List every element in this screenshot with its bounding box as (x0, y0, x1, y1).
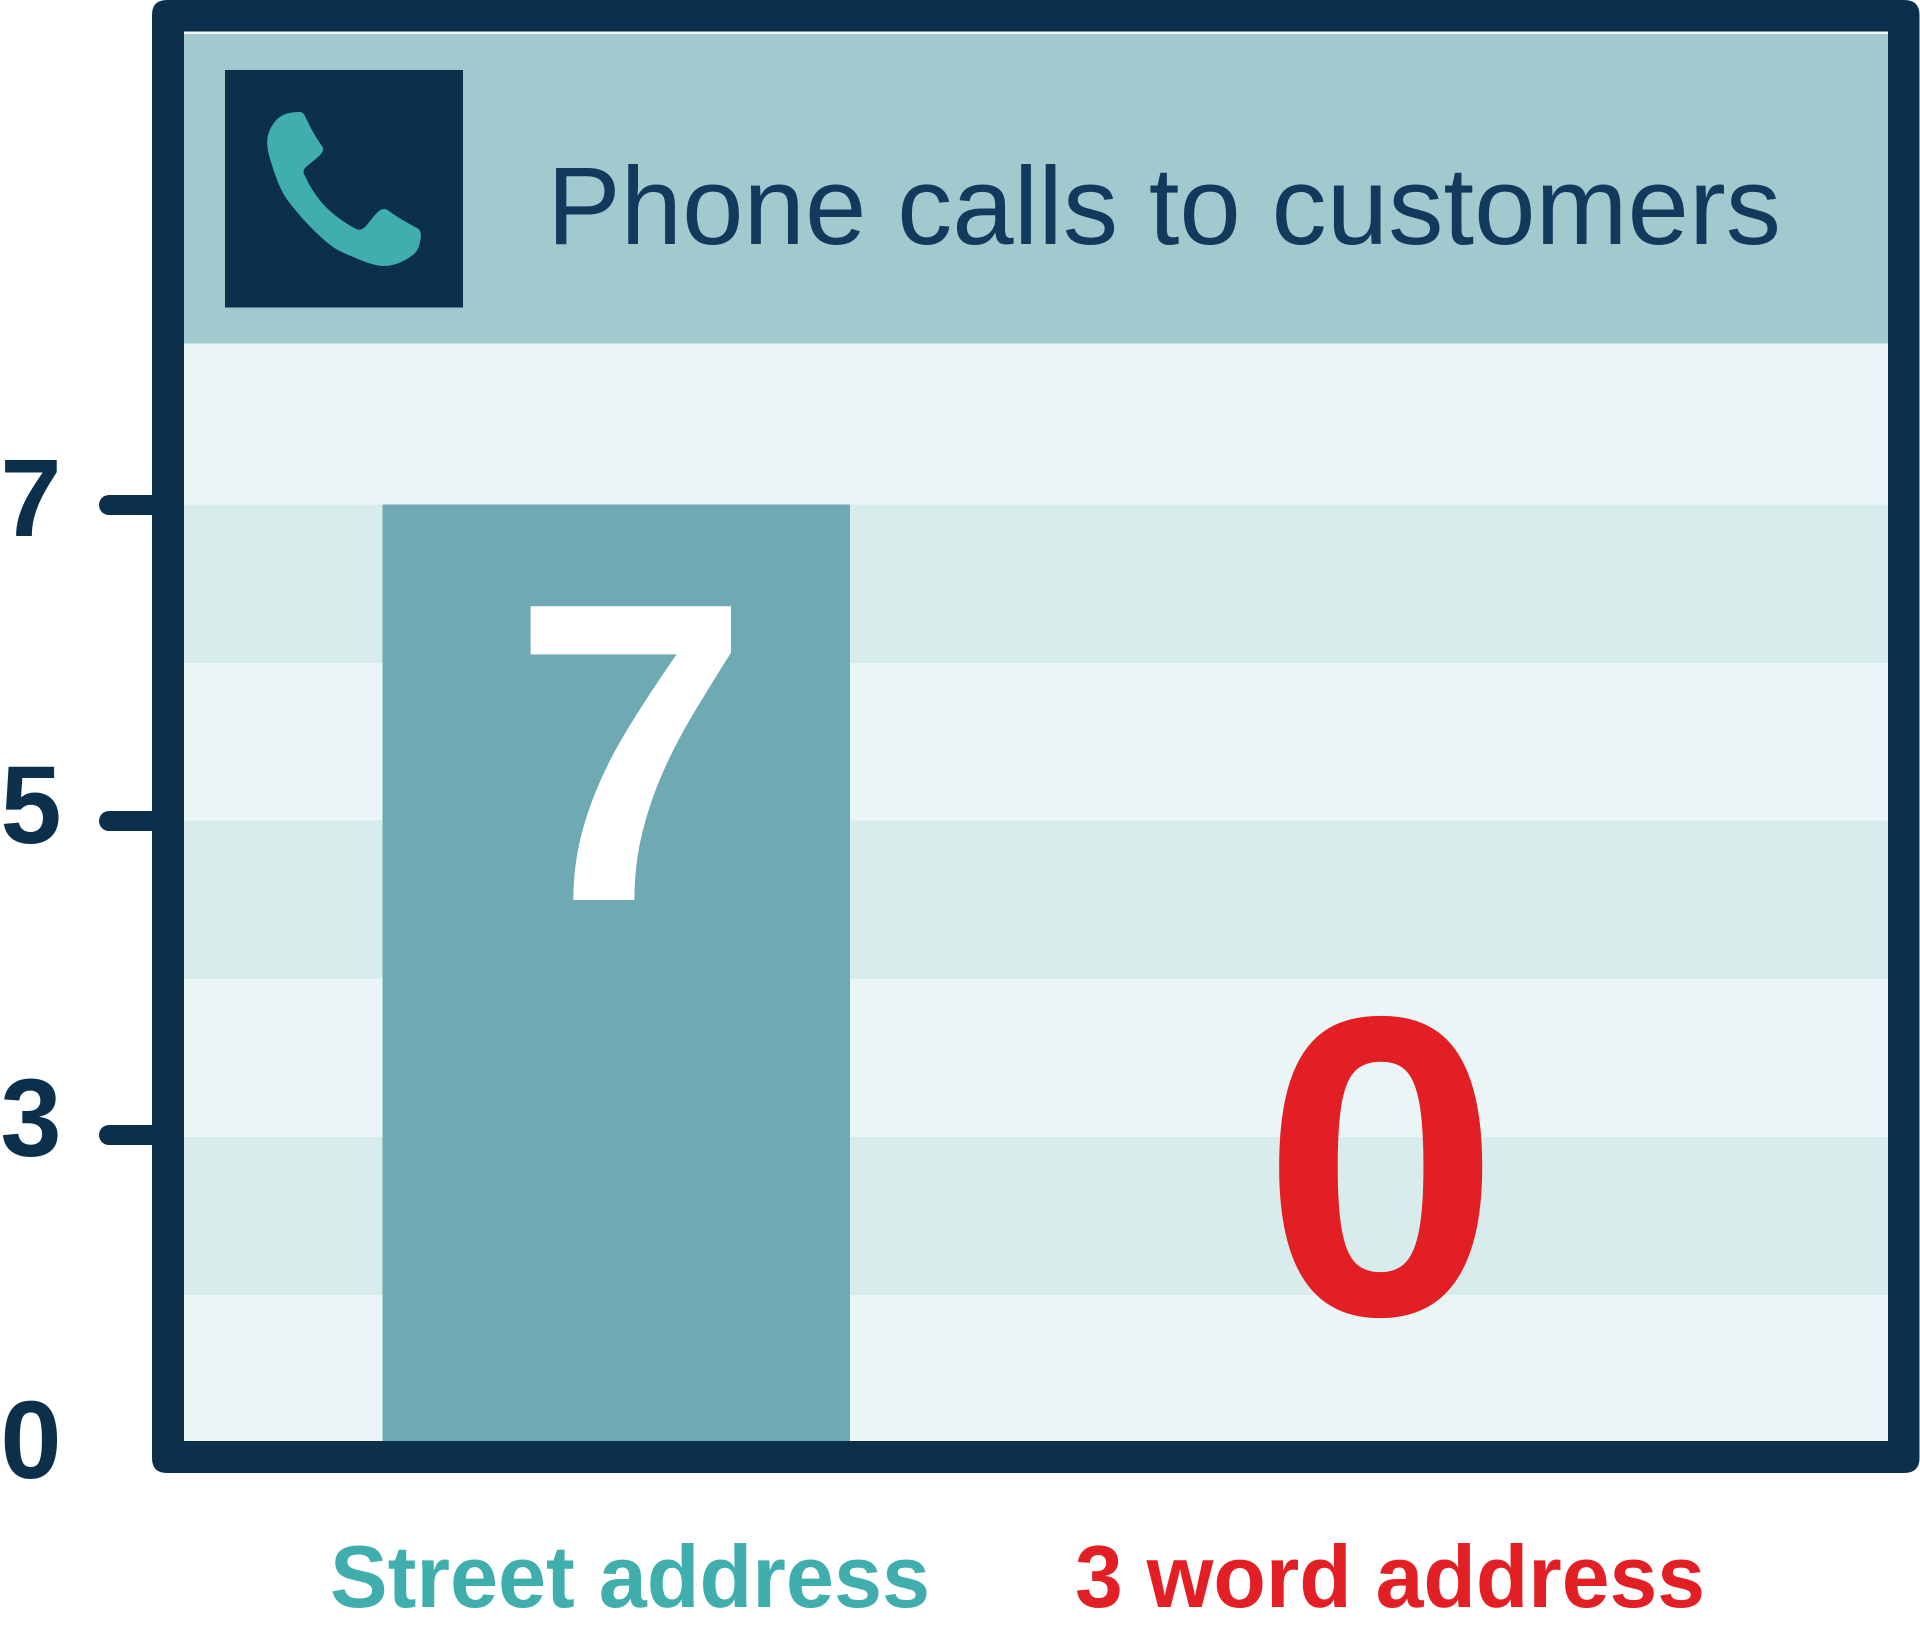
icon: phone handset (225, 70, 463, 308)
axis label 0: 0 (0, 1379, 62, 1502)
bar value: 7 (512, 514, 750, 991)
axis label 7: 7 (0, 437, 62, 560)
axis label 3: 3 (0, 1057, 62, 1180)
axis label 5: 5 (0, 744, 62, 867)
bar: street address value 7 (382, 504, 850, 1441)
category label: 3 word address: 3 word address (1075, 1527, 1705, 1626)
tick 3 (99, 1125, 152, 1145)
heading: Phone calls to customers (547, 145, 1781, 268)
panel: header band (184, 32, 1888, 344)
category label: street address: Street address (330, 1527, 930, 1626)
y axis ticks and labels (0, 437, 152, 1502)
value: 3 word address 0: 0 (1262, 928, 1500, 1405)
plot background stripes (184, 32, 1888, 1441)
tick 5 (99, 811, 152, 831)
tick 7 (99, 495, 152, 515)
